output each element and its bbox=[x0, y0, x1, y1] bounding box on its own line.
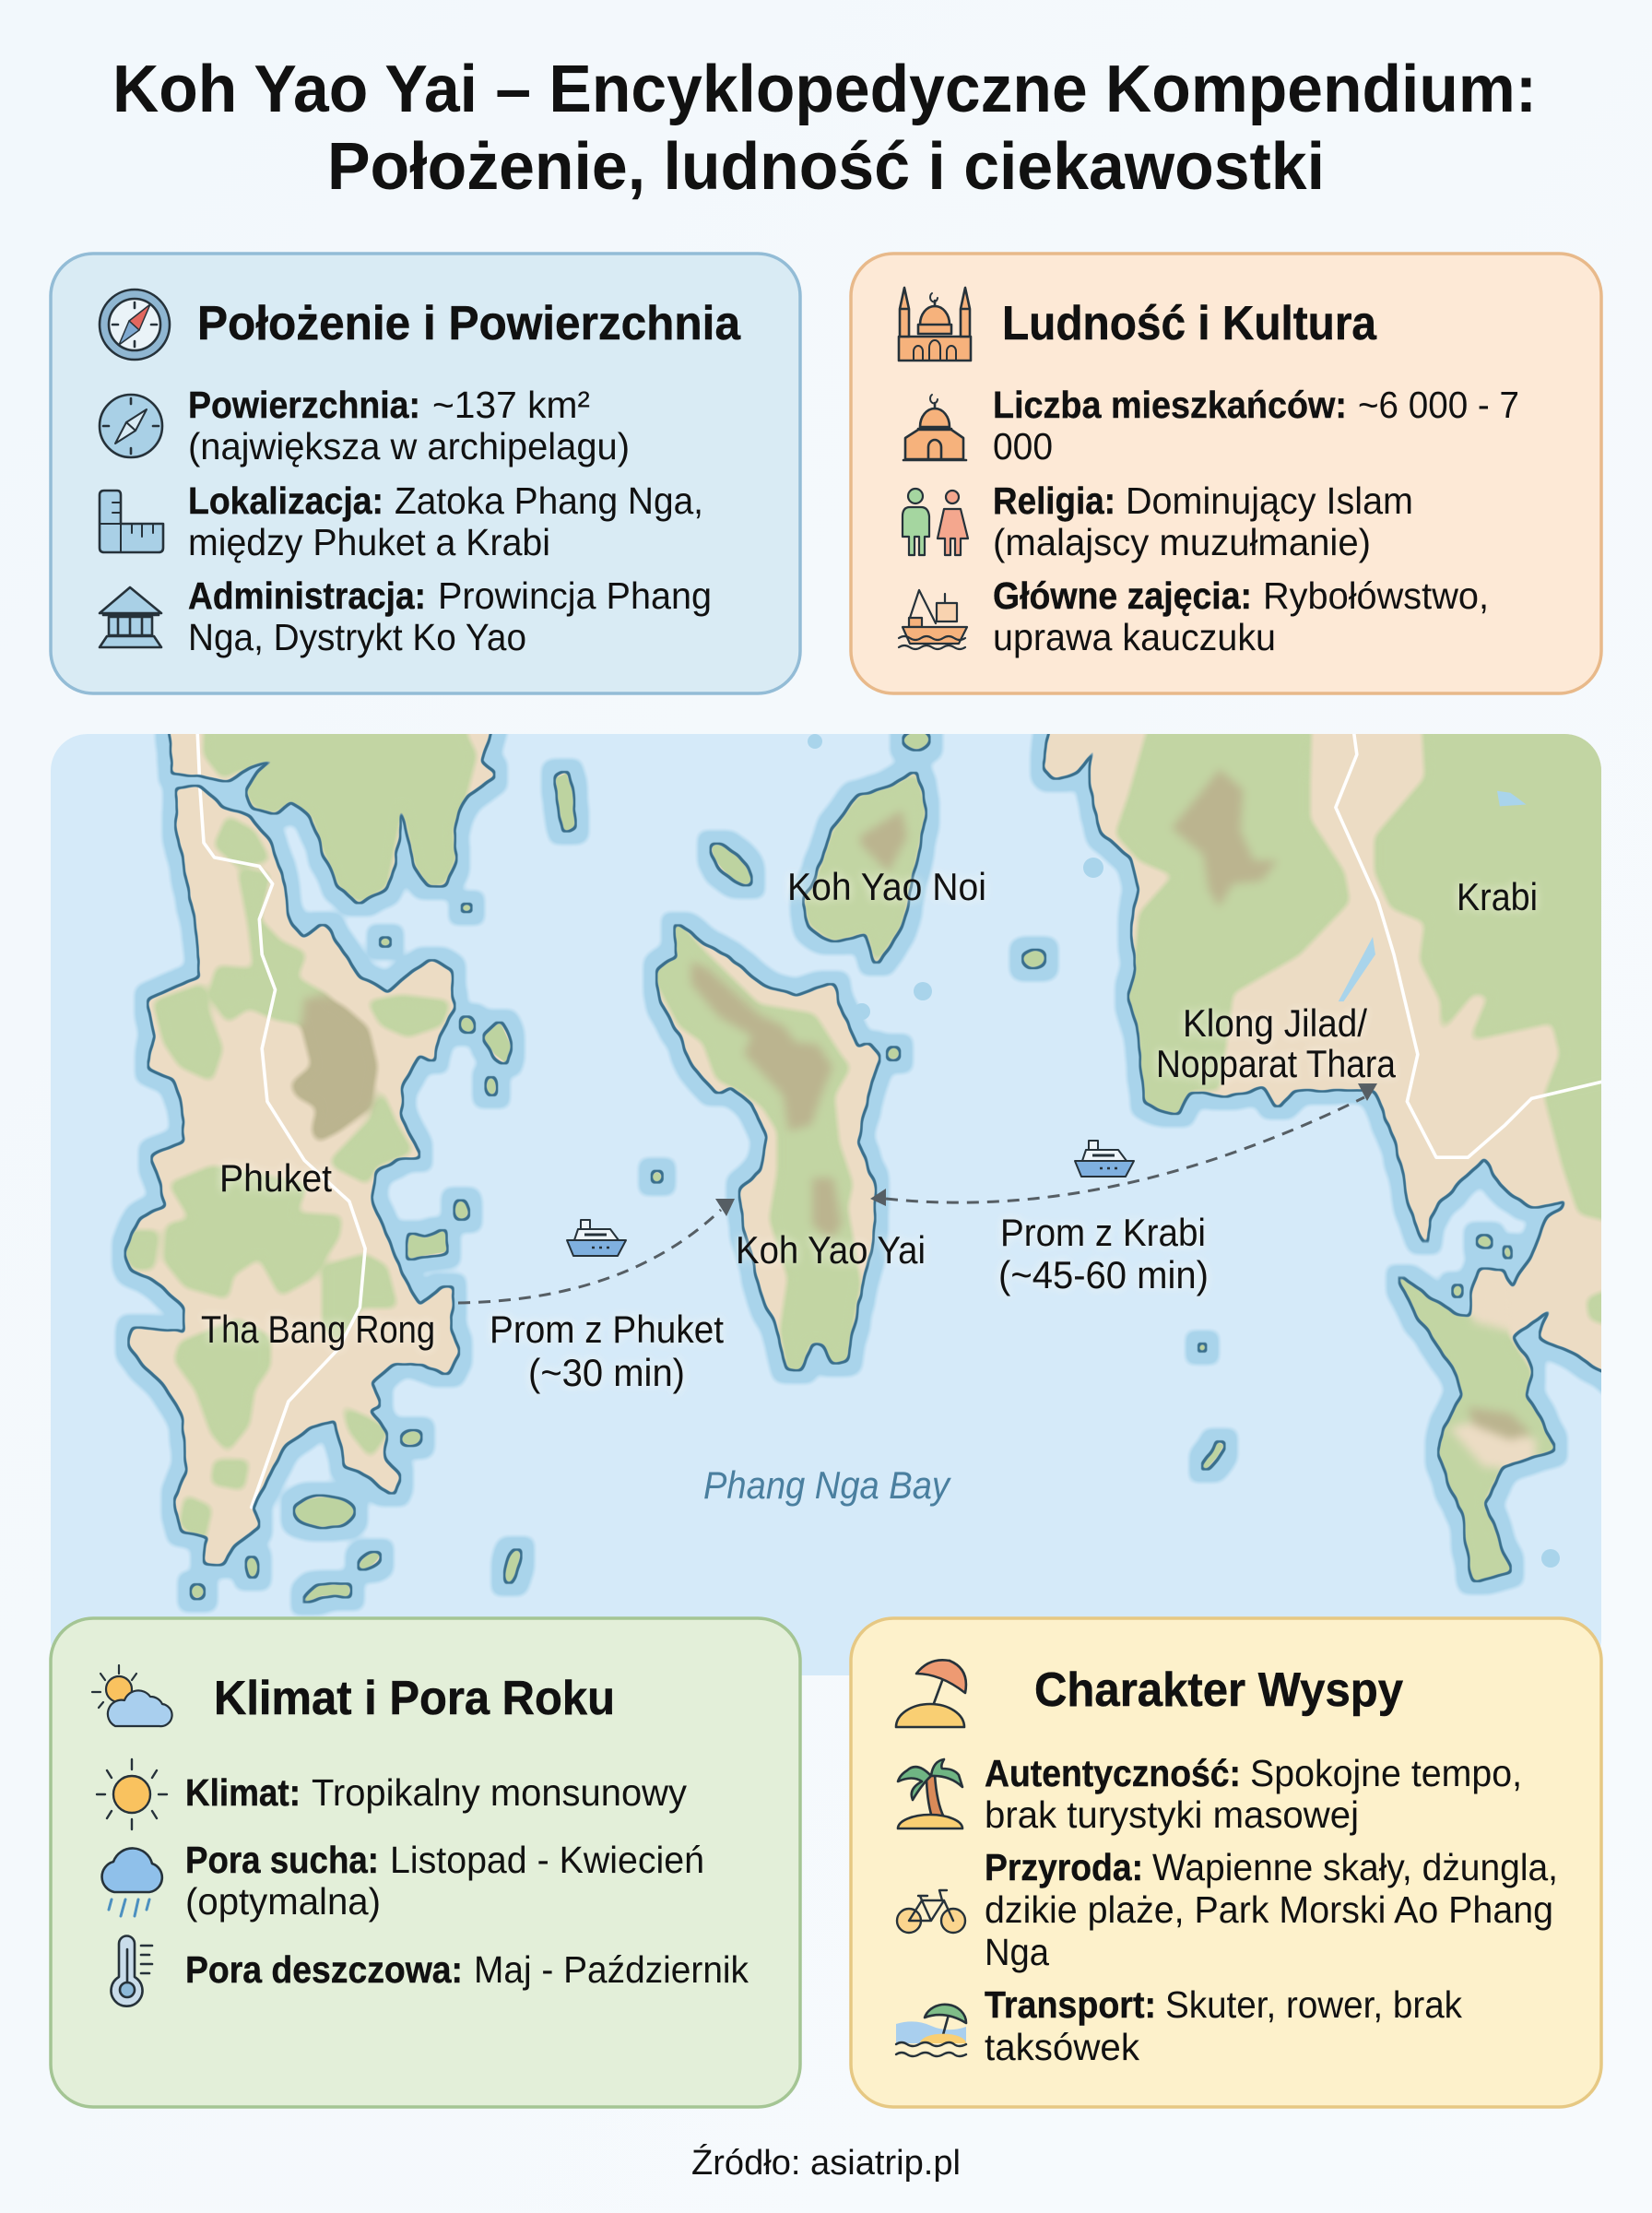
panel: Charakter Wyspy bbox=[851, 1618, 1601, 2107]
icon: ferry near Phuket route bbox=[567, 1220, 626, 1256]
text: Autentyczność bbox=[985, 1752, 1522, 1836]
text: Lokalizacja: Zatoka Phang Nga, bbox=[395, 479, 703, 522]
map labels: Tha Bang Rong bbox=[201, 1308, 435, 1351]
text: Transport: taksówek bbox=[985, 2026, 1139, 2068]
text: Lokalizacja: Lokalizacja: bbox=[188, 479, 384, 522]
map labels: Prom z Krabi bbox=[1000, 1211, 1206, 1254]
arrow: ferry from Krabi bbox=[870, 1083, 1377, 1206]
text: Pora sucha: Listopad - Kwiecień bbox=[390, 1839, 704, 1881]
title bbox=[112, 53, 1537, 204]
text: Przyroda bbox=[985, 1846, 1558, 1973]
icon: fishing boat bbox=[899, 590, 967, 649]
text: Religia bbox=[993, 479, 1413, 563]
panel: Klimat i Pora Roku bbox=[51, 1618, 800, 2107]
icon: ruler bbox=[100, 491, 163, 552]
arrow: ferry from Phuket bbox=[458, 1199, 735, 1303]
icon: small mosque bbox=[903, 395, 966, 460]
map labels: (~45-60 min) bbox=[998, 1253, 1209, 1296]
text: Transport: Skuter, rower, brak bbox=[1165, 1983, 1462, 2026]
text: Transport bbox=[985, 1983, 1462, 2068]
icon: compass bbox=[100, 395, 162, 457]
text: Pora sucha: Pora sucha: bbox=[185, 1839, 379, 1881]
text: Autentyczność: brak turystyki masowej bbox=[985, 1793, 1359, 1836]
text: Klimat: Tropikalny monsunowy bbox=[312, 1771, 687, 1814]
map labels: Prom z Phuket bbox=[490, 1308, 724, 1351]
heading: Położenie i Powierzchnia bbox=[197, 297, 741, 350]
heading: Ludność i Kultura bbox=[1002, 297, 1377, 350]
map labels bbox=[201, 865, 1538, 1394]
text: Liczba mieszkańców: Liczba mieszkańców: bbox=[993, 384, 1347, 426]
icon: sun and cloud heading bbox=[92, 1665, 172, 1726]
source line: Źródło: asiatrip.pl bbox=[691, 2143, 961, 2183]
text: Przyroda: Wapienne skały, dżungla, bbox=[1152, 1846, 1558, 1888]
map labels: Koh Yao Noi bbox=[787, 865, 986, 908]
title: Położenie, ludność i ciekawostki bbox=[327, 130, 1325, 204]
text: Powierzchnia: Powierzchnia: bbox=[188, 384, 420, 426]
map labels: (~30 min) bbox=[528, 1351, 685, 1394]
icon: compass heading bbox=[100, 290, 170, 360]
text: Religia: (malajscy muzułmanie) bbox=[993, 521, 1371, 563]
map labels: Klong Jilad/ bbox=[1183, 1001, 1367, 1045]
label: Phang Nga Bay: Phang Nga Bay bbox=[703, 1463, 952, 1507]
icon: ferry near Krabi route bbox=[1075, 1141, 1134, 1177]
text: Przyroda: dzikie plaże, Park Morski Ao Phang bbox=[985, 1888, 1553, 1931]
text: Powierzchnia bbox=[188, 384, 630, 467]
text: Pora sucha: (optymalna) bbox=[185, 1880, 381, 1923]
text: Pora deszczowa bbox=[185, 1948, 749, 1991]
heading: Klimat i Pora Roku bbox=[214, 1672, 615, 1725]
text: Autentyczność: Autentyczność: bbox=[985, 1752, 1241, 1794]
heading: Charakter Wyspy bbox=[1034, 1663, 1403, 1717]
icon: beach and sea bbox=[896, 2005, 966, 2056]
text: Główne zajęcia: Główne zajęcia: bbox=[993, 574, 1252, 617]
land cover patches bbox=[124, 684, 1648, 1604]
text: Administracja: Nga, Dystrykt Ko Yao bbox=[188, 616, 526, 658]
map labels: Nopparat Thara bbox=[1156, 1042, 1397, 1085]
panel: Położenie i Powierzchnia bbox=[51, 254, 800, 693]
coastlines bbox=[126, 684, 1648, 1604]
icon: palm tree bbox=[898, 1759, 962, 1828]
text: Przyroda: Nga bbox=[985, 1931, 1049, 1973]
text: Liczba mieszkańców bbox=[993, 384, 1519, 467]
title: Koh Yao Yai – Encyklopedyczne Kompendium: bbox=[112, 53, 1537, 126]
text: Pora sucha bbox=[185, 1839, 704, 1923]
icon: rain cloud bbox=[102, 1848, 162, 1916]
text: Pora deszczowa: Pora deszczowa: bbox=[185, 1948, 463, 1991]
text: Główne zajęcia: uprawa kauczuku bbox=[993, 616, 1276, 658]
text: Powierzchnia: (największa w archipelagu) bbox=[188, 425, 630, 467]
text: Lokalizacja bbox=[188, 479, 703, 563]
text: Administracja: Administracja: bbox=[188, 574, 426, 617]
text: Autentyczność: Spokojne tempo, bbox=[1250, 1752, 1522, 1794]
text: Lokalizacja: między Phuket a Krabi bbox=[188, 521, 550, 563]
icon: bicycle bbox=[897, 1890, 965, 1933]
icon: government building bbox=[100, 587, 161, 647]
icon: thermometer bbox=[111, 1936, 152, 2006]
text: Religia: Dominujący Islam bbox=[1126, 479, 1413, 522]
text: Klimat: Klimat: bbox=[185, 1771, 301, 1814]
text: Liczba mieszkańców: 000 bbox=[993, 425, 1053, 467]
map labels: Koh Yao Yai bbox=[736, 1228, 926, 1272]
text: Przyroda: Przyroda: bbox=[985, 1846, 1143, 1888]
text: Główne zajęcia bbox=[993, 574, 1489, 658]
text: Administracja: Prowincja Phang bbox=[438, 574, 712, 617]
map labels: Krabi bbox=[1457, 875, 1538, 918]
text: Transport: Transport: bbox=[985, 1983, 1156, 2026]
text: Pora deszczowa: Maj - Październik bbox=[474, 1948, 749, 1991]
icon: mosque heading bbox=[899, 288, 971, 361]
icon: sun bbox=[97, 1759, 167, 1829]
map labels: Phuket bbox=[219, 1156, 332, 1200]
icon: people bbox=[903, 489, 968, 555]
text: Główne zajęcia: Rybołówstwo, bbox=[1263, 574, 1489, 617]
text: Religia: Religia: bbox=[993, 479, 1115, 522]
panel: Ludność i Kultura bbox=[851, 254, 1601, 693]
lagoon and roads bbox=[195, 695, 1606, 1508]
text: Liczba mieszkańców: ~6 000 - 7 bbox=[1358, 384, 1519, 426]
text: Administracja bbox=[188, 574, 712, 658]
text: Powierzchnia: ~137 km² bbox=[432, 384, 590, 426]
panel: map of Phang Nga Bay bbox=[51, 684, 1648, 1675]
icon: beach umbrella bbox=[896, 1660, 966, 1727]
